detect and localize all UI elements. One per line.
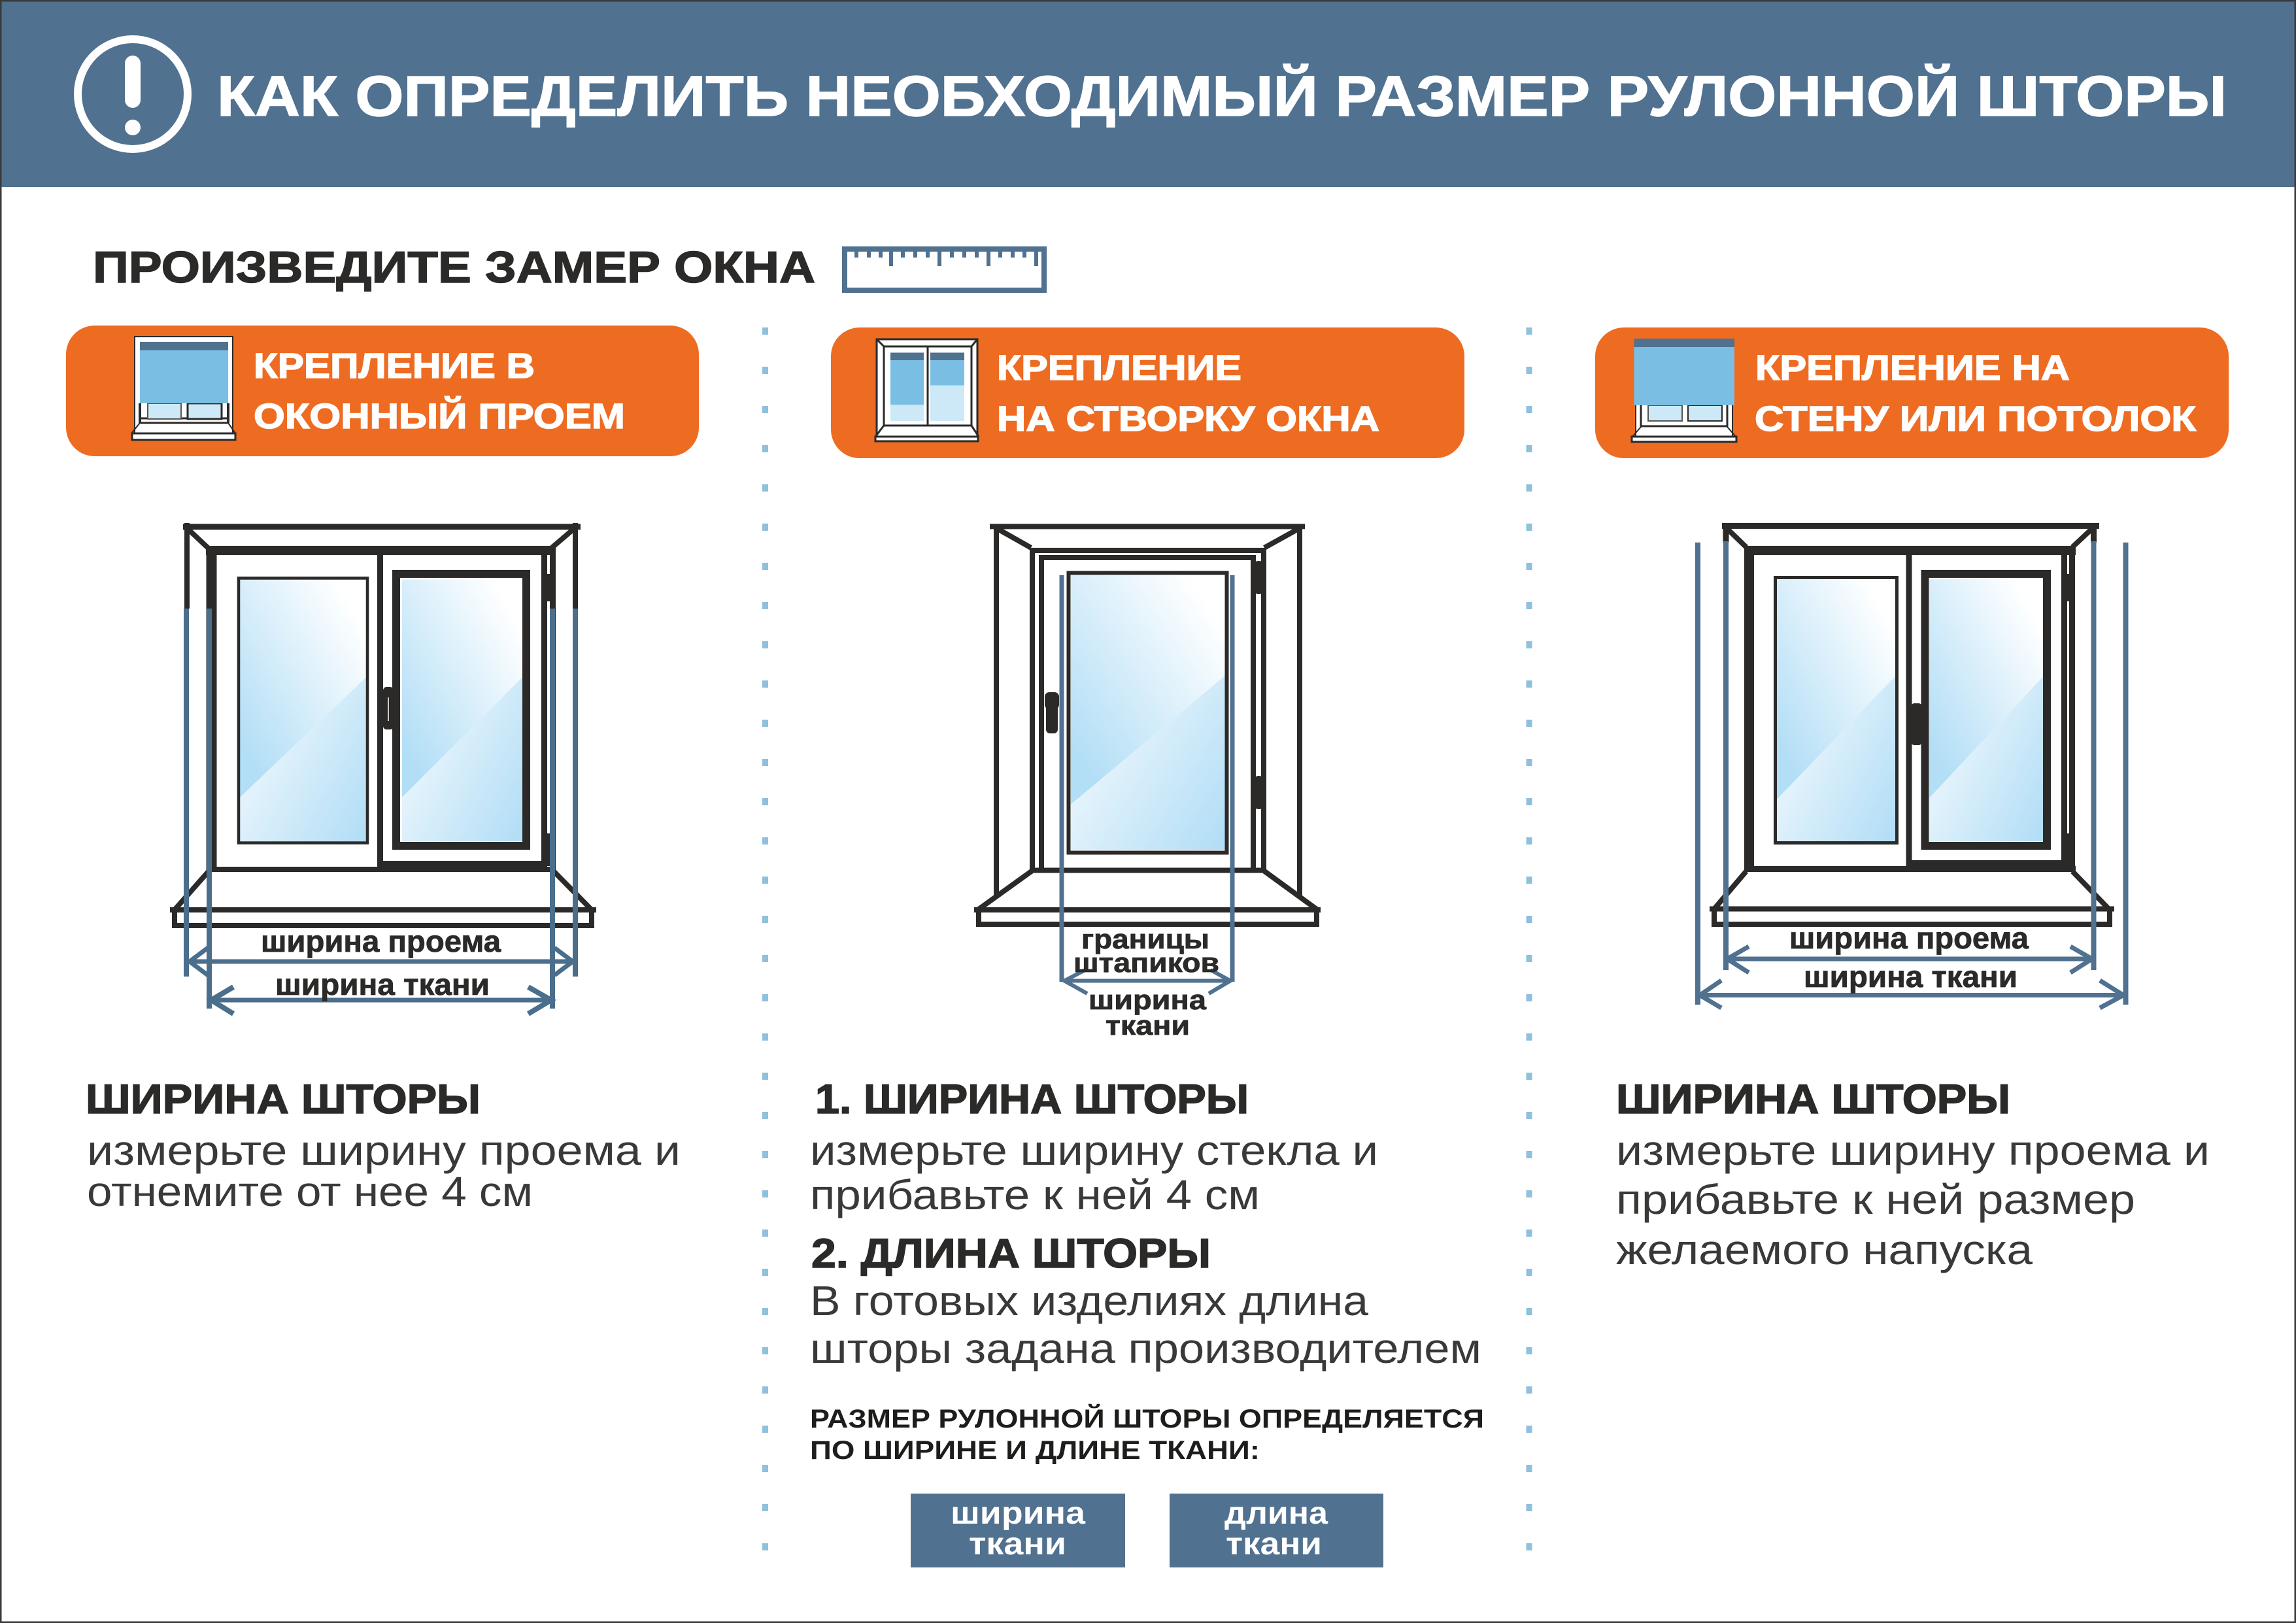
diagram: window 3: [1698, 523, 2126, 1008]
measure lines: [186, 609, 575, 1014]
header band: [0, 0, 2296, 187]
badge: mount on sash: [831, 327, 1464, 458]
dotted divider: left: [762, 327, 768, 1550]
icon: blind on wall: [1632, 339, 1736, 442]
dotted divider: right: [1526, 327, 1532, 1550]
diagram: window 2: ткани: [1106, 1010, 1190, 1041]
text: width and length instructions: шторы задана производителем: [810, 1325, 1481, 1372]
section heading: ПРОИЗВЕДИТЕ ЗАМЕР ОКНА: [93, 243, 815, 292]
diagram: window 2: штапиков: [1073, 947, 1219, 978]
badge: mount on wall: [1595, 327, 2229, 458]
title: КАК ОПРЕДЕЛИТЬ НЕОБХОДИМЫЙ РАЗМЕР РУЛОННОЙ ШТОРЫ: [217, 64, 2227, 128]
diagram: window 3: ширина ткани: [1804, 960, 2017, 994]
text: width and length instructions: прибавьте к ней 4 см: [810, 1171, 1260, 1218]
icon: blind in opening: [131, 337, 235, 440]
text: width instructions 1: ШИРИНА ШТОРЫ: [86, 1077, 481, 1122]
diagram: window 1: ширина ткани: [275, 967, 490, 1001]
panel: mount in window opening: [66, 326, 699, 1215]
badge: mount in opening: ОКОННЫЙ ПРОЕМ: [254, 396, 625, 436]
icon: blind on sash: [875, 339, 979, 441]
diagram: window 2: границы: [1081, 924, 1209, 954]
text: width instructions 3: желаемого напуска: [1616, 1226, 2033, 1273]
box: fabric length: [1170, 1494, 1383, 1567]
text: width and length instructions: ПО ШИРИНЕ И ДЛИНЕ ТКАНИ:: [810, 1436, 1260, 1465]
diagram: window 2: [974, 524, 1321, 1041]
text: width instructions 3: прибавьте к ней размер: [1616, 1176, 2135, 1223]
measure lines: [1062, 575, 1232, 994]
text: width instructions 3: измерьте ширину проема и: [1616, 1127, 2210, 1174]
panel: mount on sash: [810, 327, 1484, 1567]
box: fabric width: [911, 1494, 1125, 1567]
badge: mount in opening: [66, 326, 699, 456]
text: width instructions 1: [86, 1077, 681, 1215]
badge: mount on wall: КРЕПЛЕНИЕ НА: [1755, 348, 2070, 388]
diagram: window 1: ширина проема: [261, 924, 501, 958]
text: width and length instructions: 1. ШИРИНА ШТОРЫ: [815, 1077, 1249, 1122]
text: width and length instructions: В готовых изделиях длина: [810, 1277, 1368, 1324]
panel: mount on wall or ceiling: [1595, 327, 2229, 1273]
icon: exclamation mark: [78, 39, 188, 149]
badge: mount on sash: НА СТВОРКУ ОКНА: [997, 399, 1379, 439]
box: fabric width: ткани: [969, 1527, 1066, 1562]
badge: mount in opening: КРЕПЛЕНИЕ В: [254, 346, 535, 386]
text: width instructions 3: [1616, 1077, 2210, 1273]
diagram: window 2: ширина: [1089, 984, 1207, 1015]
icon: ruler: [845, 249, 1044, 290]
text: width instructions 3: ШИРИНА ШТОРЫ: [1616, 1077, 2010, 1122]
text: width and length instructions: РАЗМЕР РУЛОННОЙ ШТОРЫ ОПРЕДЕЛЯЕТСЯ: [810, 1403, 1484, 1433]
badge: mount on wall: СТЕНУ ИЛИ ПОТОЛОК: [1755, 399, 2197, 439]
text: width instructions 1: измерьте ширину проема и: [87, 1127, 681, 1174]
diagram: window 1: [170, 523, 596, 1014]
text: width and length instructions: 2. ДЛИНА ШТОРЫ: [811, 1231, 1211, 1277]
box: fabric width: ширина: [951, 1496, 1085, 1531]
diagram: window 3: ширина проема: [1789, 921, 2029, 955]
text: width and length instructions: измерьте ширину стекла и: [810, 1127, 1378, 1174]
text: width instructions 1: отнемите от нее 4 см: [87, 1168, 533, 1215]
box: fabric length: ткани: [1226, 1527, 1322, 1562]
box: fabric length: длина: [1224, 1496, 1328, 1531]
measure lines: [1698, 541, 2126, 1008]
text: width and length instructions: [810, 1077, 1484, 1465]
badge: mount on sash: КРЕПЛЕНИЕ: [997, 348, 1241, 388]
